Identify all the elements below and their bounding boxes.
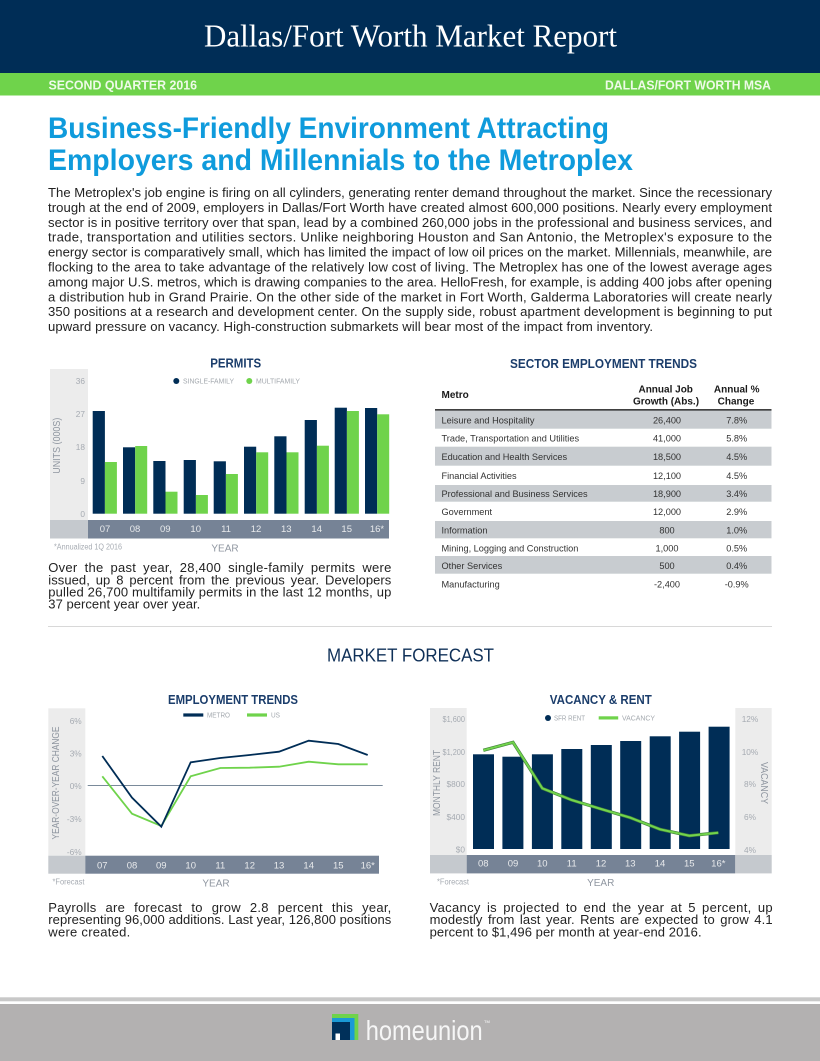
year band: 10 [537, 859, 548, 870]
row: education [435, 447, 772, 466]
table header: Annual Job [638, 384, 693, 396]
row: education: Education and Health Services [442, 452, 568, 462]
US line [102, 762, 368, 826]
row: information: 1.0% [726, 526, 747, 536]
permits heading: PERMITS [210, 357, 261, 371]
row: government: 12,000 [653, 507, 681, 517]
year band [50, 520, 389, 538]
panel: sector employment table [435, 357, 772, 590]
year band [48, 856, 379, 874]
logo wordmark: homeunion [366, 1015, 483, 1046]
market forecast heading: MARKET FORECAST [327, 645, 494, 666]
intro paragraph: sector is in positive territory over that span, lead by a combined 260,000 jobs in the professional and business services, and [48, 215, 772, 230]
employment paragraph: Payrolls are forecast to grow 2.8 percent this year, [48, 900, 391, 915]
legend: SFR RENT [554, 716, 586, 722]
year band: 16* [711, 859, 726, 870]
vacancy paragraph: Vacancy is projected to end the year at 5 percent, up [430, 900, 773, 915]
row: professional: Professional and Business Services [442, 489, 588, 499]
row: trade: Trade, Transportation and Utilities [442, 434, 579, 444]
panel: permits chart [50, 357, 390, 554]
left axis panel [430, 708, 467, 855]
x axis title: YEAR [202, 878, 230, 890]
employment paragraph: representing 96,000 additions. Last year, 126,800 positions [48, 912, 392, 927]
intro paragraph: 350 positions at a research and development center. On the supply side, robust apartment development is beginning to put [48, 304, 772, 319]
vacancy line [483, 742, 718, 836]
row: education: 4.5% [726, 452, 747, 462]
right axis panel: 8% [744, 779, 757, 789]
year band: 15 [333, 860, 344, 872]
x axis title: YEAR [587, 878, 614, 889]
row: leisure: Leisure and Hospitality [442, 415, 535, 425]
left axis panel: MONTHLY RENT [432, 750, 443, 816]
y axis panel: 27 [76, 409, 85, 419]
metro line [102, 741, 368, 827]
row: financial: Financial Activities [442, 471, 517, 481]
right axis panel: 10% [742, 747, 759, 757]
legend [173, 378, 300, 386]
row: manufacturing: -0.9% [725, 580, 749, 590]
vacancy paragraph: modestly from last year. Rents are expected to grow 4.1 [430, 912, 773, 927]
table header: Growth (Abs.) [633, 396, 699, 408]
icon: homeunion logo [332, 1014, 358, 1040]
intro paragraph: a distribution hub in Grand Prairie. On the other side of the market in Fort Worth, Galderma Laboratories will create nearly [48, 289, 772, 304]
intro paragraph: The Metroplex's job engine is firing on all cylinders, generating renter demand throughout the market. Since the recessionary [48, 185, 772, 200]
row: information [435, 521, 772, 538]
intro paragraph: flocking to the area to take advantage of the relatively low cost of living. The Metroplex has one of the lowest average ages [48, 260, 772, 274]
y axis panel: UNITS (000S) [52, 418, 63, 474]
left axis panel: $1,600 [442, 714, 465, 724]
right axis panel: VACANCY [758, 762, 769, 804]
single-family bars [93, 408, 377, 514]
y axis panel [50, 369, 88, 520]
row: other services [435, 556, 772, 574]
intro paragraph: energy sector is comparatively small, which has limited the impact of low oil prices on the market. Millennials, meanwhile, are [48, 245, 772, 260]
legend: METRO [207, 712, 231, 720]
y axis panel: 36 [76, 376, 85, 386]
panel: vacancy and rent chart [430, 693, 772, 889]
year band: 08 [130, 524, 140, 535]
permits paragraph [48, 560, 392, 611]
y axis panel: 9 [80, 476, 85, 486]
year band: 09 [508, 859, 518, 870]
permits paragraph: 37 percent year over year. [48, 596, 200, 611]
region label: DALLAS/FORT WORTH MSA [605, 78, 771, 92]
row: trade [442, 434, 747, 444]
year band: 15 [341, 524, 352, 535]
employment paragraph [47, 900, 392, 939]
legend: SINGLE-FAMILY [183, 378, 234, 386]
headline [48, 112, 634, 177]
left axis panel: $800 [447, 779, 465, 789]
row: trade: 5.8% [726, 434, 747, 444]
year band: 07 [97, 860, 108, 872]
intro paragraph: trough at the end of 2009, employers in Dallas/Fort Worth have created almost 600,000 positions. Nearly every employment [48, 200, 772, 215]
headline: Business-Friendly Environment Attracting [48, 112, 609, 145]
y axis panel: -6% [67, 847, 82, 857]
right axis panel [735, 708, 772, 855]
row: financial: 12,100 [653, 471, 681, 481]
intro paragraph: upward pressure on vacancy. High-construction submarkets will bear most of the impact from inventory. [48, 319, 653, 334]
row: information: 800 [659, 526, 675, 536]
table header: Annual % [714, 384, 760, 396]
permits paragraph: Over the past year, 28,400 single-family permits were [48, 560, 391, 575]
y axis panel: 3% [70, 749, 82, 759]
right axis panel: 6% [744, 812, 757, 822]
footnote: *Annualized 1Q 2016 [54, 542, 122, 552]
right axis panel: 12% [742, 714, 759, 724]
left axis panel: $1,200 [442, 747, 465, 757]
year band: 12 [596, 859, 606, 870]
table header: Change [718, 396, 755, 408]
row: manufacturing: -2,400 [654, 580, 680, 590]
zero line [88, 785, 383, 786]
employment heading: EMPLOYMENT TRENDS [168, 693, 298, 707]
legend: MULTIFAMILY [256, 378, 300, 386]
row: other services: 0.4% [726, 561, 747, 571]
year band: 08 [478, 859, 489, 870]
row: information: Information [442, 526, 487, 536]
row: manufacturing [442, 580, 749, 590]
headline: Employers and Millennials to the Metroplex [48, 144, 634, 177]
year band: 11 [215, 860, 225, 872]
permits paragraph: pulled 26,700 multifamily permits in the last 12 months, up [48, 584, 391, 599]
table heading: SECTOR EMPLOYMENT TRENDS [510, 357, 697, 371]
left axis panel: $400 [447, 812, 465, 822]
legend [183, 712, 280, 720]
legend [545, 715, 655, 722]
left axis panel: $0 [456, 845, 465, 855]
row: financial [442, 471, 747, 481]
row: trade: 41,000 [653, 434, 681, 444]
intro paragraph: among major U.S. metros, which is drawing companies to the area. HelloFresh, for example, is adding 400 jobs after opening [48, 274, 772, 289]
y axis panel: -3% [67, 814, 82, 824]
y axis panel: 18 [76, 442, 85, 452]
header banner [0, 0, 820, 96]
quarter label: SECOND QUARTER 2016 [48, 78, 197, 92]
y axis panel [48, 708, 85, 857]
row: other services: 500 [659, 561, 675, 571]
footnote: *Forecast [437, 877, 470, 886]
logo wordmark: TM [484, 1019, 490, 1024]
y axis panel: YEAR-OVER-YEAR CHANGE [51, 726, 62, 840]
row: financial: 4.5% [726, 471, 747, 481]
row: government: Government [442, 507, 493, 517]
report title: Dallas/Fort Worth Market Report [204, 18, 617, 54]
year band: 11 [221, 524, 231, 535]
table header: Metro [442, 390, 469, 401]
footer band [0, 997, 820, 1061]
permits paragraph: issued, up 8 percent from the previous year. Developers [48, 572, 392, 587]
intro paragraph: trade, transportation and utilities sectors. Unlike neighboring Houston and San Antonio, the Metroplex's exposure to the [48, 230, 772, 245]
vacancy paragraph: percent to $1,496 per month at year-end 2016. [430, 924, 702, 939]
row: government [442, 507, 747, 517]
year band: 12 [251, 524, 261, 535]
year band [430, 855, 772, 873]
row: education: 18,500 [653, 452, 681, 462]
row: manufacturing: Manufacturing [442, 580, 500, 590]
rent bars [473, 727, 730, 849]
y axis panel: 0 [80, 509, 85, 519]
panel: employment trends chart [48, 693, 383, 890]
year band: 09 [160, 524, 171, 535]
legend: VACANCY [622, 716, 655, 722]
year band: 07 [100, 524, 110, 535]
row: professional: 3.4% [726, 489, 747, 499]
row: mining [442, 543, 747, 553]
right axis panel: 4% [744, 845, 757, 855]
year band: 08 [127, 860, 137, 872]
year band: 15 [684, 859, 695, 870]
year band: 10 [185, 860, 196, 872]
y axis panel: 0% [70, 781, 82, 791]
row: mining: 0.5% [726, 543, 747, 553]
intro paragraph [48, 185, 772, 334]
vacancy heading: VACANCY & RENT [550, 693, 652, 707]
year band: 12 [244, 860, 255, 872]
year band: 09 [156, 860, 167, 872]
multifamily bars [105, 411, 389, 514]
row: mining: Mining, Logging and Construction [442, 543, 578, 553]
row: professional: 18,900 [653, 489, 681, 499]
year band: 10 [190, 524, 201, 535]
row: government: 2.9% [726, 507, 747, 517]
year band: 13 [274, 860, 284, 872]
year band: 16* [361, 860, 375, 872]
year band: 14 [303, 860, 314, 872]
row: professional [435, 485, 772, 502]
row: other services: Other Services [442, 561, 503, 571]
year band: 13 [281, 524, 292, 535]
row: leisure [435, 410, 772, 429]
row: mining: 1,000 [656, 543, 678, 553]
year band: 16* [370, 524, 384, 535]
year band: 13 [625, 859, 636, 870]
year band: 11 [567, 859, 577, 870]
year band: 14 [311, 524, 322, 535]
row: leisure: 26,400 [653, 415, 681, 425]
year band: 14 [655, 859, 665, 870]
vacancy paragraph [430, 900, 773, 939]
footnote: *Forecast [52, 878, 85, 886]
legend: US [271, 712, 280, 720]
row: leisure: 7.8% [726, 415, 747, 425]
employment paragraph: were created. [47, 924, 130, 939]
table header [435, 384, 772, 410]
y axis panel: 6% [70, 716, 82, 726]
